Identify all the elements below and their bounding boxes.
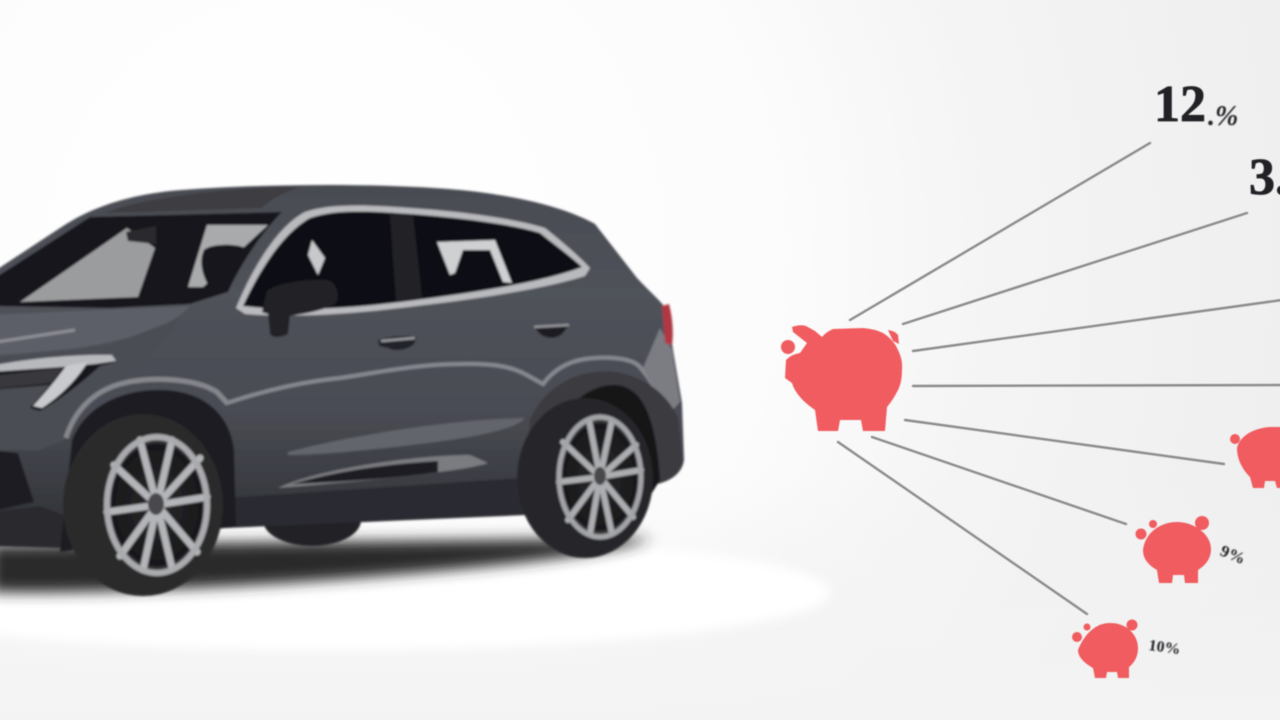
car: door pillar xyxy=(390,214,422,301)
car: front bumper xyxy=(0,506,66,548)
car: windshield glass light xyxy=(20,228,155,302)
car: side windows chrome xyxy=(236,205,590,316)
icon: piggy bank small xyxy=(1072,620,1138,678)
car: front wheel xyxy=(63,414,223,596)
car: rear window light xyxy=(437,240,512,283)
car: tail light xyxy=(662,304,673,345)
car: body xyxy=(0,185,684,548)
car: lower sill xyxy=(225,478,525,528)
car: rear quarter panel xyxy=(643,328,680,415)
car: side skirt xyxy=(278,455,488,488)
car: mirror xyxy=(262,280,338,337)
icon: piggy bank medium xyxy=(1136,516,1211,583)
car: shoulder highlight xyxy=(227,358,668,417)
car: front seat light xyxy=(308,240,325,275)
value: 12 percent: 12 xyxy=(1154,76,1206,133)
car: front wheel arch xyxy=(60,390,236,552)
car xyxy=(0,185,684,596)
value: 12 percent xyxy=(1154,76,1238,133)
value: 12 percent: .% xyxy=(1208,101,1238,132)
car: front wheel arch highlight xyxy=(66,379,228,438)
car: rear wheel arch xyxy=(524,371,682,512)
value: 10 percent: 10% xyxy=(1147,637,1181,658)
icon: piggy bank right xyxy=(1230,427,1280,488)
value: 9 percent: 9% xyxy=(1218,541,1248,568)
car: door panel highlight xyxy=(288,418,525,455)
connector lines xyxy=(838,143,1280,614)
icon: large piggy bank xyxy=(781,325,902,431)
car: door handles xyxy=(378,336,417,350)
car: far wheel xyxy=(263,494,361,546)
car: seat headrest xyxy=(201,245,245,285)
car: windshield xyxy=(0,212,282,308)
car: front grille xyxy=(0,450,34,512)
car: roof highlight xyxy=(105,187,300,213)
car: rear wheel xyxy=(517,398,653,558)
car: side windows glass xyxy=(243,211,582,309)
car: far window light xyxy=(188,225,268,287)
car: hood xyxy=(0,306,190,356)
car: headlight xyxy=(0,355,116,411)
floor spotlight and car shadow xyxy=(0,534,830,650)
